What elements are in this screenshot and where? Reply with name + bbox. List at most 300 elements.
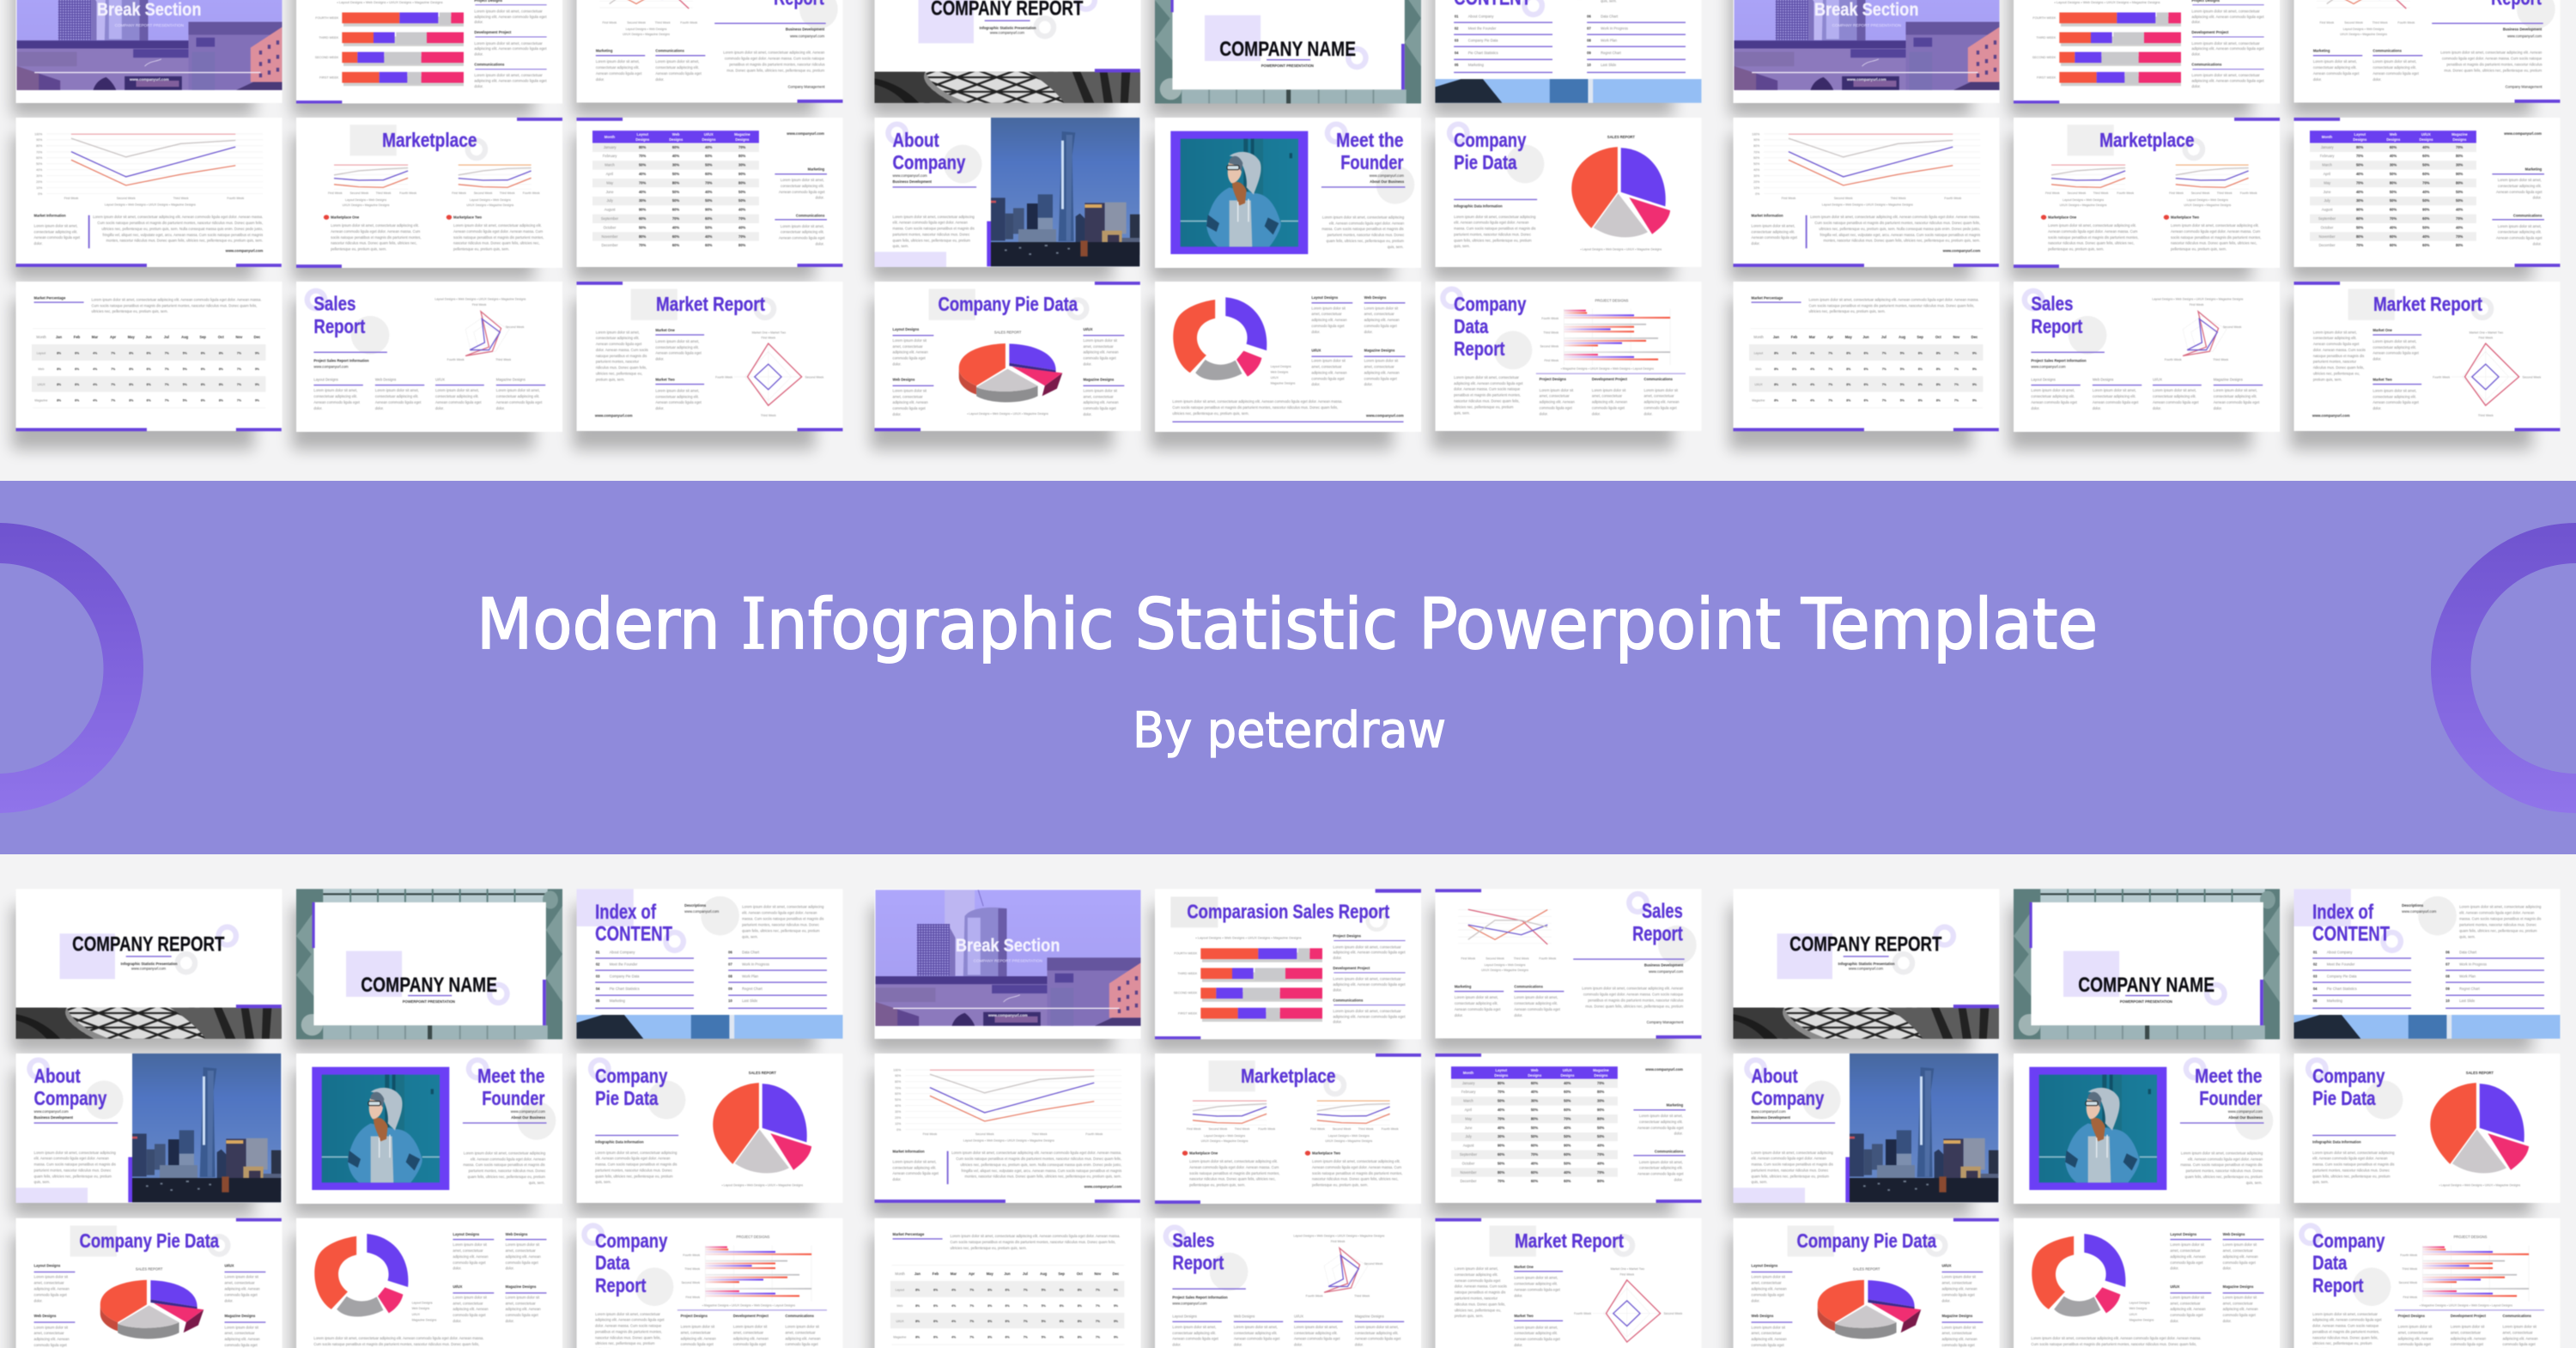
- slide: Sales Report line chart, top left: [577, 0, 843, 103]
- columns: Communications: [1644, 377, 1674, 381]
- slide: About Company: www.companyurl.com: [893, 173, 927, 178]
- slide: Marketplace, right group: [2014, 118, 2280, 268]
- right notes: dolor.: [1333, 1020, 1342, 1024]
- table: 60%: [705, 243, 713, 247]
- table: 60%: [639, 216, 646, 221]
- slide: Company Data Report bars: PROJECT DESIGNS: [1595, 298, 1629, 302]
- title: Data: [1454, 315, 1489, 337]
- paragraph: ultricies nec, pellentesque eu, pretium quis, sem.: [1172, 411, 1249, 416]
- bar chart: Third Week: [1543, 331, 1558, 334]
- slide: Company Pie Data, bottom left: [577, 1054, 843, 1203]
- line chart: Layout Designs • Web Designs: [1485, 963, 1526, 967]
- radar chart: Third Week: [761, 414, 776, 417]
- right line chart: Layout Designs • Web Designs: [470, 198, 511, 202]
- slide: Sales Report line chart: Company Management: [1647, 1020, 1684, 1024]
- table: 70%: [705, 180, 713, 185]
- table: 90%: [738, 172, 745, 176]
- contents list right: Work Plan: [742, 974, 759, 979]
- contents list left: About Company: [610, 950, 635, 954]
- slide: Marketplace, bottom middle: [1155, 1054, 1421, 1204]
- heading and intro: [34, 295, 262, 313]
- heading and intro: Market Percentage: [34, 295, 66, 300]
- slide: Sales Report line chart: [1436, 889, 1702, 1039]
- table: 50%: [672, 172, 679, 176]
- right notes: UI/UX: [1084, 327, 1093, 331]
- slide: Index of Content, bottom right: [2294, 889, 2561, 1039]
- donut chart: [1173, 297, 1267, 380]
- donut legend: Layout Designs: [1271, 365, 1291, 368]
- right ring: [2431, 523, 2576, 813]
- slide: Company Pie Data 3D pie: [874, 282, 1140, 431]
- left paragraph: parturient montes, nascetur: [596, 360, 640, 364]
- table: 80%: [672, 180, 679, 185]
- table: February: [603, 154, 617, 158]
- table: UI/UX: [704, 132, 714, 137]
- left paragraph: [596, 330, 648, 381]
- left notes: [893, 327, 933, 416]
- slide: Sales Report line chart: Report: [1632, 922, 1683, 945]
- Marketplace One block: pellentesque eu, pretium quis, sem.: [331, 246, 386, 252]
- columns: [1540, 377, 1680, 416]
- right notes: adipiscing elit. Aenean commodo ligula eget: [1333, 1014, 1406, 1018]
- left line chart: Fourth Week: [399, 191, 416, 195]
- percentage table: Jun: [145, 335, 152, 339]
- contents list right: 06: [728, 950, 732, 954]
- table: November: [602, 234, 618, 239]
- slide: Company Report, top middle: [874, 0, 1140, 103]
- title: Break Section: [956, 935, 1060, 956]
- left paragraph: Lorem ipsum dolor sit amet,: [596, 330, 640, 334]
- columns: Development Project: [1592, 377, 1628, 381]
- Marketplace Two block: sociis natoque penatibus et magnis dis parturient montes,: [453, 235, 544, 240]
- percentage table: Sep: [199, 335, 206, 339]
- slide: Company Pie Data pie chart: Infographic Data Information: [1454, 204, 1503, 209]
- paragraph: [1454, 375, 1523, 415]
- table: 40%: [738, 207, 745, 212]
- title: [1336, 129, 1404, 173]
- table: 70%: [738, 216, 745, 221]
- Marketplace One block: [324, 215, 422, 252]
- photo: glass hall: [296, 889, 562, 1039]
- right line chart: Second Week: [474, 191, 493, 195]
- line chart: 40%: [36, 168, 43, 172]
- table: Web: [672, 132, 680, 137]
- Marketplace One block: Aenean commodo ligula eget dolor. Aenean massa. Cum: [331, 229, 421, 234]
- slide: Company Name: [296, 889, 562, 1039]
- table: 40%: [639, 172, 646, 176]
- slide: Sales Report line chart, top right: [2294, 0, 2561, 103]
- slide: Company Pie Data 3D pie: Company Pie Data: [938, 293, 1078, 315]
- table: March: [605, 162, 615, 167]
- left line chart: First Week: [328, 191, 343, 195]
- percentage table: Jul: [164, 335, 169, 339]
- contents list left: Meet the Founder: [610, 962, 638, 967]
- table: 50%: [705, 198, 713, 203]
- stacked bar chart: THIRD WEEK: [1177, 972, 1198, 975]
- slide: Company Pie Data pie chart: [1436, 118, 1702, 267]
- paragraph: Lorem ipsum dolor sit amet, consectetuar: [1454, 375, 1519, 380]
- slide: Market Report, bottom middle: [1436, 1218, 1702, 1348]
- paragraph: fringilla vel, aliquet nec, vulputate eget, arcu. Aenean massa. Cum sociis natoque penatibus et magnis: [103, 233, 263, 237]
- table: 50%: [738, 198, 745, 203]
- bottom notes: Marketing: [1455, 984, 1472, 988]
- paragraph: Lorem ipsum dolor sit amet, consectetuar adipiscing elit. Aenean commodo ligula eget dolor. Aenean massa.: [93, 215, 263, 219]
- contents list right: 09: [728, 987, 732, 991]
- radar chart: First Week: [761, 336, 775, 340]
- slide: Marketplace: [296, 118, 562, 268]
- percentage table: Nov: [235, 335, 243, 339]
- right line chart: First Week: [452, 191, 466, 195]
- four columns: Layout Designs: [313, 378, 338, 382]
- donut legend: [1271, 365, 1296, 386]
- contents list left: Marketing: [610, 999, 625, 1003]
- slide: Meet the Founder, bottom right: [2014, 1054, 2280, 1204]
- percentage table: Oct: [218, 335, 224, 339]
- percentage table: Month: [36, 335, 46, 339]
- slide: Meet the Founder: www.companyurl.com: [1370, 173, 1404, 178]
- right notes: Lorem ipsum dolor sit amet, consectetuar: [1333, 944, 1401, 949]
- slide: line chart, right group: [1733, 118, 1999, 267]
- paragraph: ultricies nec, pellentesque eu, pretium quis, sem. Nulla consequat massa quis enim. Donec pede justo,: [101, 227, 263, 231]
- right line chart: UI/UX Designs • Magazine Designs: [466, 203, 513, 207]
- right line chart: Fourth Week: [523, 191, 540, 195]
- slide: Market Report radar: [577, 282, 843, 431]
- table: June: [606, 190, 614, 194]
- table: 40%: [639, 190, 646, 194]
- table: Designs: [735, 137, 750, 142]
- slide: Index of Content: CONTENT: [595, 922, 672, 945]
- donut legend: UI/UX: [1271, 376, 1279, 380]
- slide: Comparasion Sales Report: [1155, 889, 1421, 1039]
- four columns: UI/UX: [435, 378, 445, 382]
- contents list right: Regret Chart: [742, 987, 763, 991]
- title: [1632, 900, 1683, 945]
- slide: monthly table, bottom middle: [1436, 1054, 1702, 1203]
- bar chart: Fourth Week: [1541, 317, 1558, 320]
- title: Modern Infographic Statistic Powerpoint Template: [477, 585, 2098, 665]
- table: 30%: [639, 198, 646, 203]
- four columns: Web Designs: [375, 378, 396, 382]
- slide: Company Report: Infographic Statistic Presentation: [121, 962, 178, 966]
- line chart: 50%: [36, 162, 43, 166]
- slide: Meet the Founder: About Our Business: [1370, 179, 1405, 184]
- slide: Company Report: www.companyurl.com: [131, 966, 166, 970]
- table: 60%: [672, 243, 679, 247]
- title: About: [893, 129, 939, 151]
- percentage table: UI/UX: [37, 383, 46, 386]
- slide: Index of Content: [577, 889, 843, 1039]
- Marketplace Two block: Aenean commodo ligula eget dolor. Aenean massa. Cum: [453, 229, 544, 234]
- slide: Company Pie Data 3D pie: • Layout Designs • Web Designs • UI/UX • Magazine Designs: [967, 412, 1048, 416]
- table: 80%: [639, 145, 646, 149]
- table: 60%: [705, 172, 713, 176]
- side notes: www.companyurl.com: [786, 131, 824, 136]
- slide: 3D pie, bottom right: [1733, 1218, 1999, 1348]
- contents list left: 01: [596, 950, 600, 954]
- line chart: First Week: [64, 197, 78, 200]
- right notes: Lorem ipsum dolor sit amet, consectetuar: [1333, 977, 1401, 981]
- Marketplace Two block: Marketplace Two: [453, 215, 482, 219]
- bar chart: • Magazine Designs • UI/UX Designs • Web Designs • Layout Designs: [1561, 367, 1654, 371]
- slide: Meet the Founder, bottom left: [296, 1054, 562, 1204]
- right notes: Lorem ipsum dolor sit amet, consectetuar: [1333, 1009, 1401, 1013]
- left notes: Web Designs: [893, 377, 915, 381]
- slide: About Company: Business Development: [893, 179, 933, 184]
- notes: Layout Designs: [1311, 295, 1339, 300]
- bar chart: Second Week: [1540, 344, 1558, 348]
- left paragraph: consectetuar adipiscing elit.: [596, 336, 640, 340]
- left paragraph: dolor. Aenean massa. Cum sociis: [596, 348, 648, 352]
- line chart: 70%: [36, 150, 43, 154]
- Marketplace Two block: Lorem ipsum dolor sit amet, consectetuar adipiscing elit.: [453, 223, 542, 228]
- left paragraph: natoque penatibus et magnis dis: [596, 354, 647, 358]
- slide: Company Name, bottom right: [2014, 889, 2280, 1039]
- slide: Sales Report radar: www.companyurl.com: [313, 364, 349, 369]
- line chart: 0%: [38, 192, 43, 196]
- stacked bar chart: [1174, 948, 1322, 1022]
- slide: Company Data Report bars: Company: [1454, 293, 1527, 315]
- slide: Break Section: [874, 889, 1140, 1039]
- table: 60%: [672, 234, 679, 239]
- table: 50%: [705, 162, 713, 167]
- table: 90%: [705, 207, 713, 212]
- title: [1454, 129, 1527, 173]
- slide: Sales Report radar: Project Sales Report Information: [313, 359, 369, 363]
- percentage table: [32, 328, 265, 408]
- slide: Company Data Report, bottom left: [577, 1218, 843, 1348]
- table: 40%: [672, 225, 679, 230]
- Marketplace One block: sociis natoque penatibus et magnis dis parturient montes,: [331, 235, 422, 240]
- line chart: Third Week: [173, 197, 189, 200]
- bottom notes: Communications: [1514, 984, 1543, 988]
- table: 50%: [639, 225, 646, 230]
- slide: Meet the Founder: Founder: [1340, 151, 1404, 173]
- photo: purple-tinted buildings: [875, 890, 1140, 1026]
- slide: Company Pie Data pie chart: • Layout Designs • Web Designs • UI/UX • Magazine Designs: [1580, 247, 1662, 251]
- left line chart: Layout Designs • Web Designs: [345, 198, 386, 202]
- table: December: [602, 243, 618, 247]
- photo: blue buildings: [577, 1015, 842, 1039]
- right line chart: Third Week: [500, 191, 515, 195]
- table: 70%: [639, 243, 646, 247]
- percentage table: Apr: [110, 335, 116, 339]
- left ring: [0, 523, 143, 813]
- slide: Market Percentage table: [15, 282, 282, 431]
- Marketplace One block: nascetur ridiculus mus. Donec quam felis, ultricies nec,: [331, 241, 417, 246]
- slide: Company Name, top middle: [1155, 0, 1421, 103]
- stacked bar chart: SECOND WEEK: [1174, 992, 1198, 995]
- paragraph: [1582, 986, 1684, 1009]
- paragraph: mus. Donec quam felis, ultricies nec, pellentesque eu, pretium: [1585, 1004, 1684, 1009]
- table: 70%: [672, 216, 679, 221]
- title: Report: [1454, 337, 1505, 360]
- slide: Index of Content, top middle: [1436, 0, 1702, 103]
- slide: Company Report: [15, 889, 282, 1039]
- contents list left: 03: [596, 974, 600, 979]
- radar chart: [715, 331, 823, 417]
- table: 40%: [705, 190, 713, 194]
- table: October: [604, 225, 617, 230]
- percentage table: May: [128, 335, 135, 339]
- bar chart: [1540, 309, 1670, 371]
- contents list right: Work In Progress: [742, 962, 770, 967]
- Marketplace One block: Marketplace One: [331, 215, 360, 219]
- photo: lattice roof: [15, 1005, 282, 1039]
- stacked bar chart: FIRST WEEK: [1178, 1011, 1198, 1015]
- right notes: Communications: [1333, 998, 1364, 1002]
- slide: Company Pie Data, bottom right: [2294, 1054, 2561, 1203]
- slide: Index of Content: Descriptions: [684, 903, 707, 908]
- slide: Break Section, top right: [1733, 0, 1999, 103]
- paragraph: Lorem ipsum dolor sit amet, consectetuar adipiscing elit. Aenean: [1582, 986, 1684, 991]
- Marketplace Two block: nascetur ridiculus mus. Donec quam felis, ultricies nec,: [453, 241, 540, 246]
- table: 30%: [672, 162, 679, 167]
- title: [313, 293, 366, 337]
- slide: Comparasion Sales Report, top left: [296, 0, 562, 103]
- contents list left: Pie Chart Statistics: [610, 987, 640, 991]
- slide: Company Pie Data 3D pie: SALES REPORT: [994, 330, 1022, 335]
- Market One and Two notes: Market Two: [655, 377, 675, 381]
- slide: About Company, bottom right: [1733, 1054, 1999, 1203]
- slide: Break Section, top left: [15, 0, 282, 103]
- stacked bar chart: FOURTH WEEK: [1174, 952, 1198, 956]
- percentage table: Dec: [254, 335, 261, 339]
- right notes: Project Designs: [1333, 934, 1362, 938]
- table: 50%: [672, 190, 679, 194]
- slide: Comparasion Sales Report: • Layout Designs • Web Designs • UI/UX Designs • Magazine Designs: [1195, 936, 1302, 940]
- slide: Break Section: COMPANY REPORT PRESENTATION: [974, 959, 1042, 963]
- radar chart: Third Week: [495, 358, 511, 361]
- slide: Sales Report line chart: Business Development: [1644, 962, 1684, 968]
- title: [893, 129, 966, 173]
- slide: About Company: [874, 118, 1140, 267]
- line chart: Fourth Week: [227, 197, 244, 200]
- contents list right: Data Chart: [742, 950, 760, 954]
- slide: 3D pie, bottom left: [15, 1218, 282, 1348]
- contents list left: 04: [596, 987, 600, 991]
- right notes: dolor.: [1333, 956, 1342, 960]
- contents list right: 07: [728, 962, 732, 967]
- market information text: [34, 213, 81, 246]
- slide: Sales Report radar: Report: [313, 315, 366, 337]
- table: 70%: [738, 234, 745, 239]
- line chart: UI/UX Designs • Magazine Designs: [1481, 968, 1528, 972]
- line chart: 20%: [36, 180, 43, 184]
- table: 80%: [738, 154, 745, 158]
- slide: Company Pie Data pie chart: Pie Data: [1454, 151, 1517, 173]
- left notes: Layout Designs: [893, 327, 920, 331]
- photo: skyline: [987, 118, 1139, 266]
- table: August: [605, 207, 616, 212]
- slide: line chart, bottom middle: [874, 1054, 1140, 1203]
- heading and intro: ultricies nec, pellentesque eu, pretium quis, sem.: [92, 309, 168, 313]
- table: 80%: [639, 234, 646, 239]
- table: July: [606, 198, 614, 203]
- slide: Comparasion Sales Report, top right: [2014, 0, 2280, 103]
- right line chart: [452, 165, 540, 207]
- notes: [1311, 295, 1405, 386]
- line chart: Second Week: [117, 197, 136, 200]
- bottom notes: [1455, 984, 1564, 1017]
- table: 60%: [705, 216, 713, 221]
- right notes: Development Project: [1333, 966, 1370, 970]
- pie chart: [1571, 147, 1670, 237]
- percentage table: Layout: [37, 352, 46, 355]
- market information text: Market Information: [34, 213, 66, 217]
- banner: [0, 481, 2576, 854]
- notes: UI/UX: [1311, 348, 1321, 352]
- subtitle: By peterdraw: [1133, 702, 1446, 759]
- right notes: adipiscing elit. Aenean commodo ligula eget: [1333, 982, 1406, 987]
- paragraph: dolor. Aenean massa. Cum sociis natoque: [1454, 387, 1521, 392]
- Marketplace Two block: pellentesque eu, pretium quis, sem.: [453, 246, 509, 252]
- side notes: Communications: [796, 213, 825, 217]
- four columns: Magazine Designs: [496, 378, 526, 382]
- slide: monthly table, right group: [2294, 118, 2561, 267]
- paragraph: [1172, 399, 1342, 416]
- left paragraph: ultricies nec, pellentesque eu,: [596, 371, 642, 376]
- table: Designs: [702, 137, 716, 142]
- paragraph: quis, sem.: [1454, 410, 1470, 415]
- left line chart: Second Week: [350, 191, 368, 195]
- Market One and Two notes: [655, 328, 704, 410]
- line chart: 60%: [36, 156, 43, 160]
- slide: donut, bottom left: [296, 1218, 562, 1348]
- table: Designs: [635, 137, 650, 142]
- table: 60%: [705, 154, 713, 158]
- bar chart: First Week: [1544, 359, 1558, 362]
- percentage table: Feb: [74, 335, 81, 339]
- right notes: dolor.: [1333, 987, 1342, 992]
- slide: Sales Report radar, right group: [2014, 282, 2280, 432]
- table: 40%: [705, 145, 713, 149]
- table: January: [604, 145, 617, 149]
- percentage table: Mar: [92, 335, 98, 339]
- table: 60%: [672, 207, 679, 212]
- radar chart: Fourth Week: [447, 358, 465, 361]
- columns: Project Designs: [1540, 377, 1566, 381]
- slide: Sales Report line chart: www.companyurl.com: [1649, 969, 1683, 974]
- slide: Marketplace: Marketplace: [382, 129, 477, 151]
- radar chart: First Week: [472, 303, 487, 307]
- heading and intro: Lorem ipsum dolor sit amet, consectetuar adipiscing elit. Aenean commodo ligula eget dolor. Aenean massa.: [92, 297, 262, 301]
- four columns: [313, 378, 545, 410]
- table: 30%: [738, 162, 745, 167]
- slide: Market Percentage, bottom middle: [874, 1218, 1140, 1348]
- table: 70%: [639, 154, 646, 158]
- Market One and Two notes: Market One: [655, 328, 675, 332]
- slide: donut, bottom right: [2014, 1218, 2280, 1348]
- percentage table: Jan: [56, 335, 62, 339]
- slide: Meet the Founder: [1155, 118, 1421, 268]
- table: 40%: [738, 225, 745, 230]
- paragraph: Cum sociis natoque penatibus et magnis dis parturient montes, nascetur ridiculus mus. Donec quam felis,: [1172, 405, 1338, 410]
- title: [1454, 293, 1527, 360]
- slide: Sales Report radar, bottom middle: [1155, 1218, 1421, 1348]
- line chart: Fourth Week: [1539, 956, 1556, 961]
- Marketplace One block: Lorem ipsum dolor sit amet, consectetuar adipiscing elit.: [331, 223, 419, 228]
- notes: Web Designs: [1364, 295, 1387, 300]
- slide: Company Name: POWERPOINT PRESENTATION: [403, 999, 455, 1004]
- slide: Company Data Report, bottom right: [2294, 1218, 2561, 1348]
- paragraph: montes, nascetur ridiculus mus. Donec quam felis, ultricies nec, pellentesque eu, pretium quis, sem.: [106, 238, 263, 243]
- donut legend: Web Designs: [1271, 370, 1288, 373]
- top slide grid: [15, 0, 2561, 432]
- line chart: Third Week: [1514, 956, 1529, 961]
- radar chart: Second Week: [805, 375, 823, 379]
- radar chart: [434, 298, 526, 361]
- left paragraph: pretium quis, sem.: [596, 377, 625, 381]
